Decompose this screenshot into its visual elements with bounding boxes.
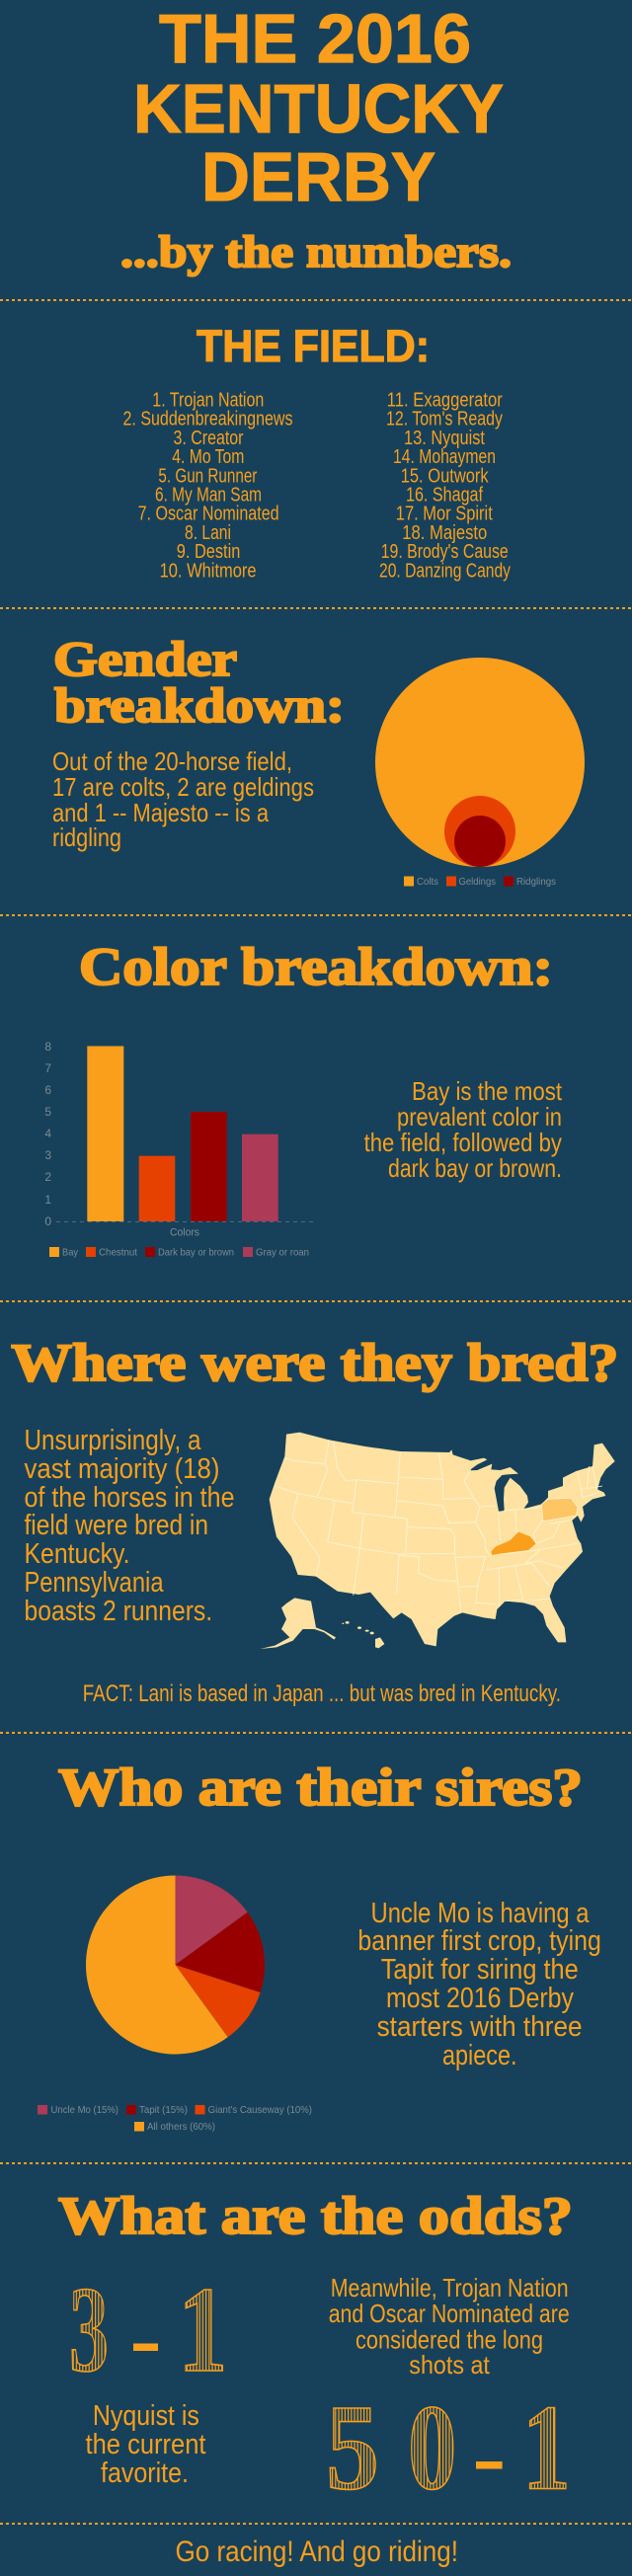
legend: colors [49,1246,309,1258]
bar chart: colors: 5 [44,1105,51,1119]
legend: colors: Bay [62,1246,79,1258]
list: post positions 1 to 10: 4. Mo Tom [172,446,244,468]
text: Nyquist favorite [85,2400,205,2489]
text: color summary: prevalent color in [397,1102,562,1132]
bar chart: colors: 1 [44,1193,51,1207]
bar chart: colors: 2 [44,1170,51,1184]
text: breeding summary: Pennsylvania [24,1567,164,1599]
title: THE 2016 [159,0,471,77]
text: breeding summary: vast majority (18) [24,1453,219,1485]
list: post positions 1 to 10 [122,389,292,582]
text: long shots: considered the long [356,2324,543,2354]
list: post positions 1 to 10: 7. Oscar Nominated [138,504,279,525]
list: post positions 1 to 10: 10. Whitmore [160,560,257,582]
big number: 50-1 [326,2381,571,2516]
closing line: Go racing! And go riding! [176,2536,458,2568]
title: KENTUCKY [133,70,504,147]
text: Nyquist favorite: Nyquist is [93,2400,199,2432]
list: post positions 11 to 20 [379,389,511,582]
list: post positions 11 to 20: 12. Tom's Ready [386,409,503,430]
panel: the field [122,321,511,582]
bar chart: colors: 7 [44,1061,51,1075]
text: sires summary: most 2016 Derby [386,1983,574,2014]
list: post positions 11 to 20: 14. Mohaymen [393,446,496,468]
text: breeding summary: Kentucky. [24,1538,130,1570]
list: post positions 1 to 10: 6. My Man Sam [155,484,262,506]
list: post positions 11 to 20: 13. Nyquist [404,428,485,449]
text: long shots: and Oscar Nominated are [329,2299,570,2328]
text: breeding summary: Unsurprisingly, a [24,1425,201,1456]
list: post positions 1 to 10: 9. Destin [177,541,240,563]
text: Nyquist favorite: favorite. [101,2458,189,2489]
heading: where were they bred: Where were they bred? [11,1333,618,1392]
bar chart: colors: 0 [44,1214,51,1228]
panel: where were they bred [11,1333,618,1707]
list: post positions 11 to 20: 19. Brody's Cause [381,541,509,563]
panel: color breakdown [44,937,563,1258]
panel: sires [38,1757,601,2133]
text: color summary: dark bay or brown. [388,1153,562,1183]
legend: gender: Ridglings [516,876,556,888]
list: post positions 11 to 20: 17. Mor Spirit [396,504,493,525]
text: long shots [329,2273,570,2380]
text: sires summary [357,1898,601,2071]
heading: gender breakdown [53,631,345,733]
text: long shots: Meanwhile, Trojan Nation [331,2273,569,2303]
legend: gender: Geldings [458,876,496,888]
text: Nyquist favorite: the current [85,2429,205,2460]
list: post positions 1 to 10: 2. Suddenbreakingnews [122,409,292,430]
legend: gender: Colts [417,876,438,888]
text: gender summary: Out of the 20-horse field, [52,746,292,776]
legend: colors: Gray or roan [256,1246,309,1258]
big number: 3-1: 1 [178,2262,228,2397]
pie chart: sires [86,1876,265,2054]
bar chart: colors: Colors [170,1226,199,1238]
text: gender summary: 17 are colts, 2 are geldings [52,772,314,802]
list: post positions 11 to 20: 11. Exaggerator [387,389,503,411]
list: post positions 1 to 10: 5. Gun Runner [158,465,258,487]
text: long shots: shots at [409,2350,491,2380]
text: sires summary: Tapit for siring the [381,1954,579,1986]
text: gender summary [52,746,314,852]
legend: colors: Chestnut [99,1246,137,1258]
panel: gender breakdown [52,631,585,888]
list: post positions 11 to 20: 15. Outwork [401,465,490,487]
list: post positions 1 to 10: 8. Lani [185,522,231,544]
text: color summary: Bay is the most [412,1076,563,1106]
legend: gender [404,876,556,888]
text: sires summary: starters with three [377,2011,583,2043]
panel: odds [58,2186,573,2516]
heading: the field: THE FIELD: [197,321,430,371]
title [133,0,504,215]
bar chart: colors: 4 [44,1127,51,1140]
big number: 3-1 [69,2262,228,2397]
text: breeding summary: field were bred in [24,1510,208,1541]
big number: 50-1: 1 [522,2381,571,2516]
text: sires summary: Uncle Mo is having a [371,1898,590,1929]
text: gender summary: ridgling [52,822,121,852]
text: color summary [364,1076,563,1183]
big number: 50-1: 5 [326,2381,379,2516]
list: post positions 11 to 20: 16. Shagaf [406,484,483,506]
legend: sires: Uncle Mo (15%) [51,2104,118,2116]
legend: sires: All others (60%) [147,2121,215,2133]
big number: 3-1: 3 [69,2262,109,2397]
heading: what are the odds: What are the odds? [58,2186,573,2245]
legend: colors: Dark bay or brown [158,1246,234,1258]
text: color summary: the field, followed by [364,1128,562,1157]
bar chart: colors: 3 [44,1148,51,1162]
heading: gender breakdown: breakdown: [54,677,345,733]
text: breeding summary: boasts 2 runners. [24,1596,212,1627]
legend: sires [38,2104,312,2133]
legend: sires: Tapit (15%) [139,2104,188,2116]
text: sires summary: apiece. [442,2040,517,2071]
legend: sires: Giant's Causeway (10%) [208,2104,312,2116]
title: DERBY [201,138,435,215]
heading: color breakdown: Color breakdown: [79,937,553,996]
list: post positions 1 to 10: 3. Creator [174,428,244,449]
bar chart: colors: 8 [44,1040,51,1054]
map: United States with Kentucky and Pennsylvania highlighted [260,1433,615,1649]
text: breeding summary: of the horses in the [24,1482,235,1514]
chart: nested circles [375,658,585,867]
list: post positions 1 to 10: 1. Trojan Nation [152,389,264,411]
heading: gender breakdown: Gender [53,631,237,686]
text: breeding summary [24,1425,235,1627]
heading: who are their sires: Who are their sires? [58,1757,583,1817]
text: gender summary: and 1 -- Majesto -- is a [52,798,269,827]
big number: 50-1: 0 [408,2381,456,2516]
list: post positions 11 to 20: 18. Majesto [402,522,487,544]
bar chart: colors [44,1040,314,1238]
bar chart: colors: 6 [44,1083,51,1097]
list: post positions 11 to 20: 20. Danzing Candy [379,560,511,582]
subtitle: ...by the numbers. [120,226,512,276]
